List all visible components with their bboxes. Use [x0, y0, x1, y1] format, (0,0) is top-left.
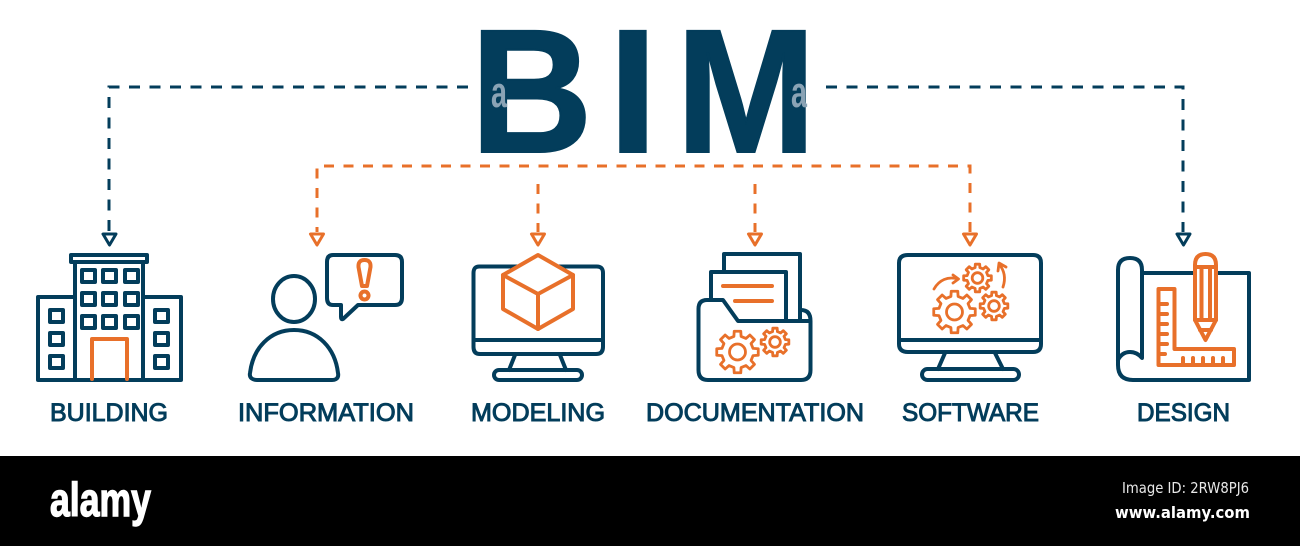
image id: Image ID: 2RW8PJ6 [1122, 479, 1249, 497]
watermark letters on title [491, 68, 807, 117]
icon: folder with documents and gears [698, 254, 810, 380]
logo: alamy: alamy [50, 473, 151, 526]
label: software: SOFTWARE [902, 399, 1039, 427]
label: information: INFORMATION [238, 399, 414, 427]
label: design: DESIGN [1137, 399, 1230, 427]
website: www.alamy.com [1115, 503, 1250, 522]
connector: orange branch to information and software [310, 166, 976, 245]
connector: orange arrow to documentation [748, 184, 762, 245]
icon: monitor with cube [474, 255, 603, 380]
connector: design arrow [826, 87, 1190, 245]
icon: building [38, 255, 181, 380]
label: building: BUILDING [50, 399, 168, 427]
watermark letters on title: a [491, 68, 507, 117]
icon: blueprint with ruler and pencil [1118, 254, 1249, 380]
connector: building arrow [103, 87, 468, 245]
title: BIM [470, 0, 816, 190]
watermark letters on title: a [791, 68, 807, 117]
icon: monitor with gears [899, 255, 1041, 380]
label: documentation: DOCUMENTATION [646, 399, 864, 427]
label: modeling: MODELING [471, 399, 605, 427]
connector: orange arrow to modeling [532, 184, 544, 245]
footer band [0, 456, 1300, 546]
icon: person with speech bubble [250, 255, 402, 380]
